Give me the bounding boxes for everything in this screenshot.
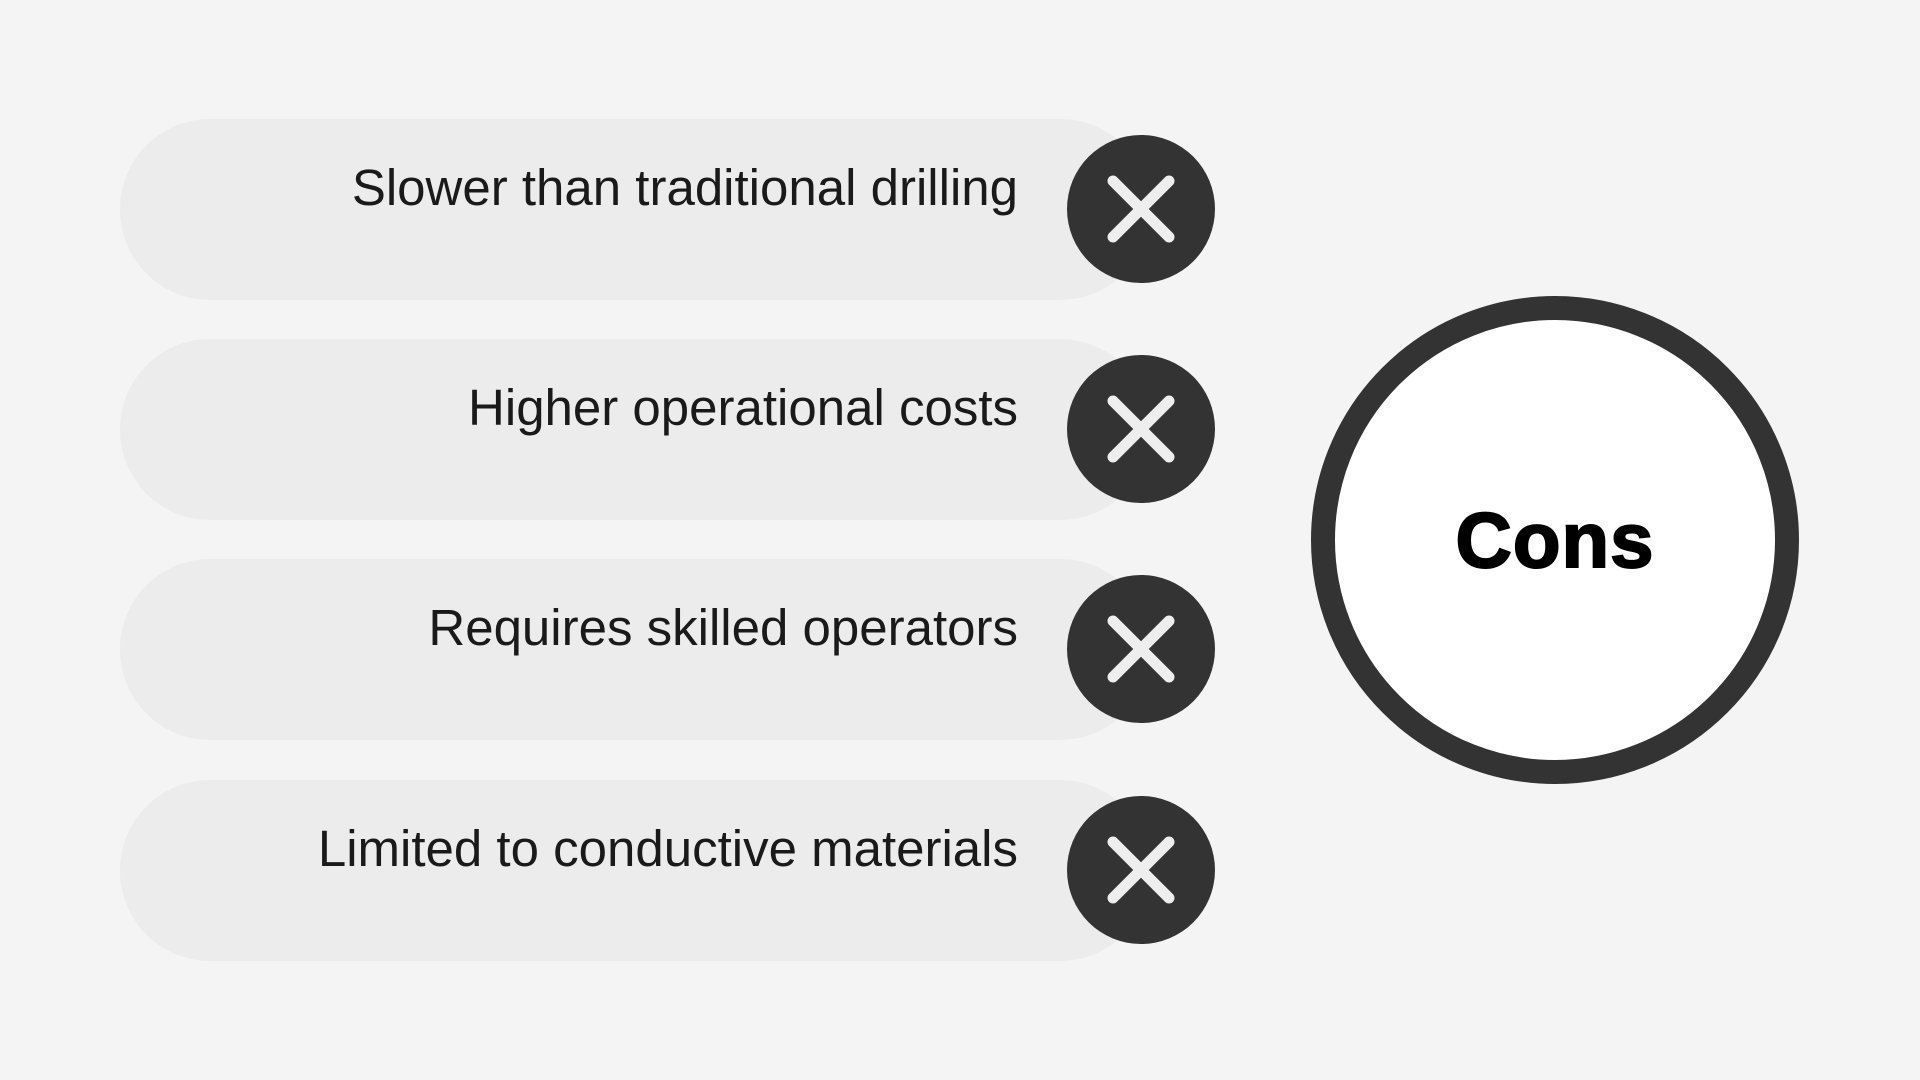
heading: Cons: Cons — [1456, 496, 1654, 584]
icon 3 — [1067, 575, 1215, 723]
item 4 — [318, 796, 1215, 944]
item 3 — [428, 575, 1215, 723]
item 2 — [468, 355, 1215, 503]
text 3: Requires skilled operators — [428, 599, 1018, 656]
cons circle — [1311, 296, 1799, 784]
icon 4 — [1067, 796, 1215, 944]
pill 1 — [120, 119, 1150, 300]
text 1: Slower than traditional drilling — [352, 159, 1018, 216]
text 4: Limited to conductive materials — [318, 820, 1018, 877]
pill 4 — [120, 780, 1150, 961]
pill 2 — [120, 339, 1150, 520]
item 1 — [352, 135, 1215, 283]
icon 1 — [1067, 135, 1215, 283]
icon 2 — [1067, 355, 1215, 503]
pill 3 — [120, 559, 1150, 740]
text 2: Higher operational costs — [468, 379, 1018, 436]
